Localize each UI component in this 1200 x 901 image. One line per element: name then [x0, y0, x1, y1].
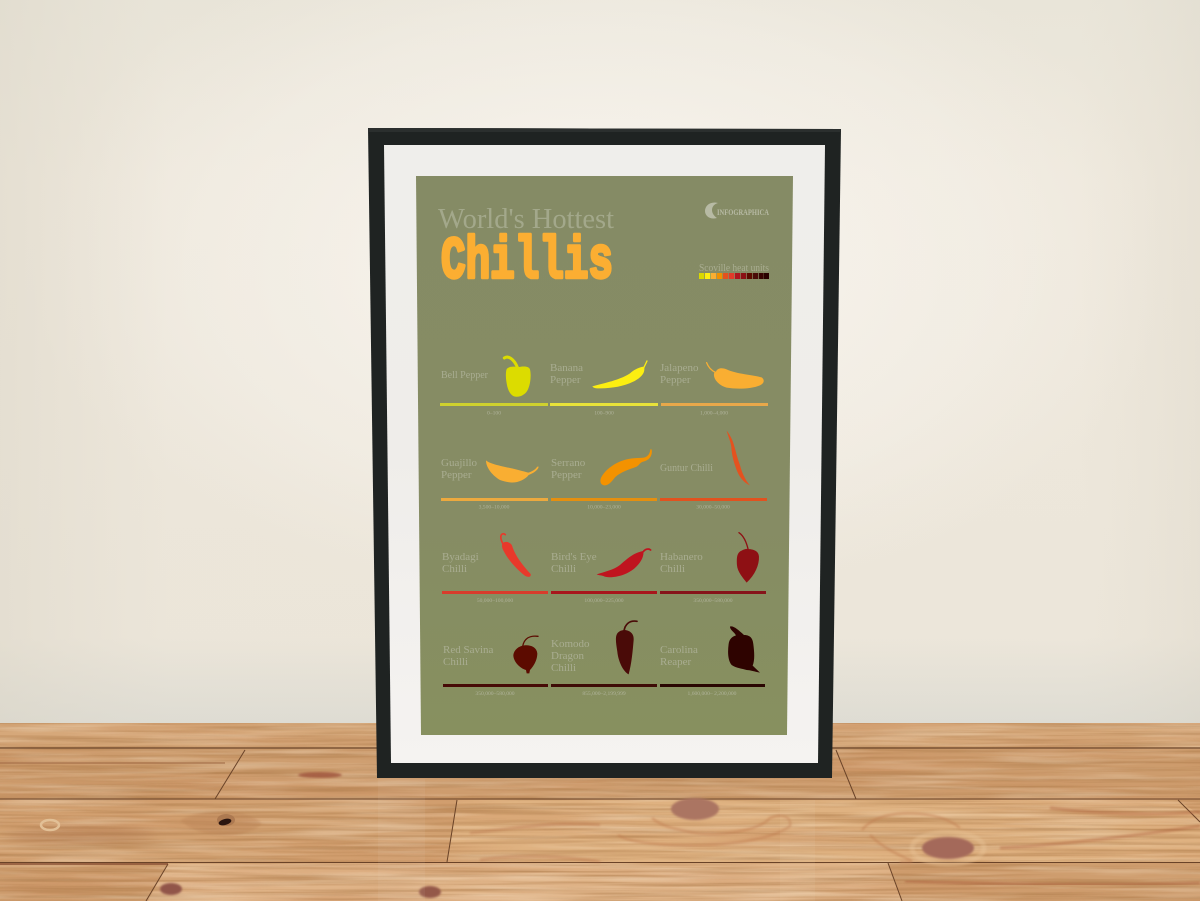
plank joints: [0, 748, 1200, 901]
logo: [705, 203, 769, 219]
Jalapeno Pepper: [660, 362, 768, 416]
wood grain streaks and knots: [0, 763, 1200, 898]
Carolina Reaper: [660, 626, 765, 697]
Komodo Dragon Chilli: Chilli: [551, 662, 576, 674]
Banana Pepper: [550, 361, 658, 416]
Habanero Chilli: 350,000–580,000: [693, 598, 733, 604]
Bell Pepper: 0–100: [487, 410, 501, 416]
Red Savina Chilli: [443, 636, 548, 697]
Byadagi Chilli: Byadagi: [442, 551, 479, 563]
Banana Pepper: 100–900: [594, 410, 614, 416]
Carolina Reaper: Carolina: [660, 644, 698, 656]
Komodo Dragon Chilli: Dragon: [551, 650, 584, 662]
poster title: [438, 204, 614, 296]
Banana Pepper: Banana: [550, 362, 583, 374]
Guajillo Pepper: Pepper: [441, 469, 472, 481]
Jalapeno Pepper: Jalapeno: [660, 362, 699, 374]
Jalapeno Pepper: Pepper: [660, 374, 691, 386]
Byadagi Chilli: [442, 534, 548, 604]
Bell Pepper: [440, 357, 548, 416]
Guntur Chilli: Guntur Chilli: [660, 462, 713, 474]
Komodo Dragon Chilli: [551, 621, 657, 697]
Guntur Chilli: [660, 431, 767, 510]
Red Savina Chilli: 350,000–580,000: [475, 691, 515, 697]
Bell Pepper: Bell Pepper: [441, 369, 488, 381]
Jalapeno Pepper: 1,000–4,000: [700, 410, 728, 416]
skirting board: [0, 723, 1200, 749]
wooden floor: [0, 723, 1200, 901]
Serrano Pepper: [551, 449, 657, 510]
Guajillo Pepper: [441, 457, 548, 510]
mat board: [384, 145, 825, 763]
poster: [416, 176, 793, 735]
Carolina Reaper: Reaper: [660, 656, 691, 668]
legend: Scoville heat units: Scoville heat units: [699, 262, 769, 274]
Habanero Chilli: [660, 533, 766, 604]
poster title: World's Hottest: [438, 204, 614, 235]
Habanero Chilli: Habanero: [660, 551, 703, 563]
Guajillo Pepper: Guajillo: [441, 457, 478, 469]
Serrano Pepper: 10,000–23,000: [587, 504, 621, 510]
Red Savina Chilli: Chilli: [443, 656, 468, 668]
picture frame: [368, 128, 841, 778]
Carolina Reaper: 1,600,000– 2,200,000: [688, 691, 737, 697]
Bird's Eye Chilli: 100,000–225,000: [584, 598, 624, 604]
Bird's Eye Chilli: Bird's Eye: [551, 551, 597, 563]
legend: Scoville heat units: [699, 262, 769, 279]
Serrano Pepper: Pepper: [551, 469, 582, 481]
Habanero Chilli: Chilli: [660, 563, 685, 575]
Serrano Pepper: Serrano: [551, 457, 586, 469]
Komodo Dragon Chilli: Komodo: [551, 638, 590, 650]
frame reflection: [378, 779, 815, 901]
Bird's Eye Chilli: Chilli: [551, 563, 576, 575]
Banana Pepper: Pepper: [550, 374, 581, 386]
icon: crescent: [705, 203, 718, 219]
Guntur Chilli: 30,000–50,000: [696, 504, 730, 510]
Byadagi Chilli: Chilli: [442, 563, 467, 575]
Guajillo Pepper: 3,500–10,000: [479, 504, 510, 510]
logo: INFOGRAPHICA: [717, 208, 769, 217]
poster title: Chillis: [441, 228, 613, 296]
Bird's Eye Chilli: [551, 549, 657, 604]
Red Savina Chilli: Red Savina: [443, 644, 494, 656]
Komodo Dragon Chilli: 855,000–2,199,999: [582, 691, 626, 697]
Byadagi Chilli: 50,000–100,000: [477, 598, 513, 604]
